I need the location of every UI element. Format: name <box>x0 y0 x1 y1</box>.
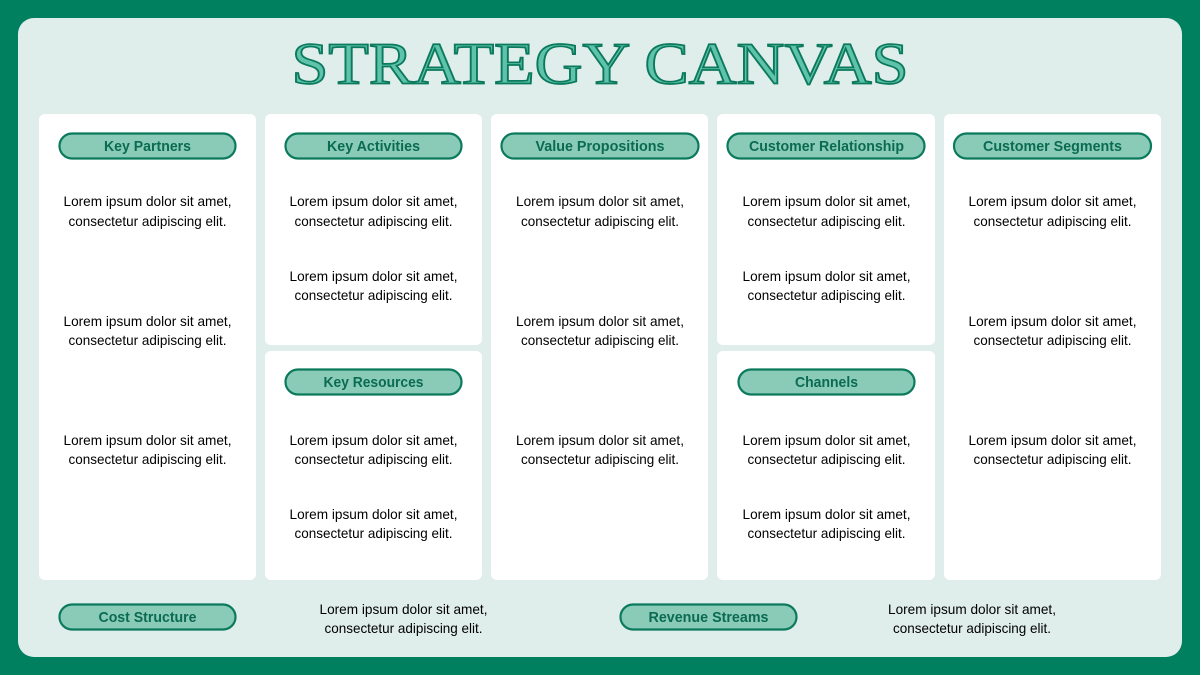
label: key resources: Key Resources <box>324 374 424 391</box>
label: key activities: Key Activities <box>327 138 420 155</box>
label: value propositions: Value Propositions <box>536 138 664 155</box>
text: key resources 2: consectetur adipiscing elit. <box>294 525 452 541</box>
text: key resources 1: consectetur adipiscing elit. <box>294 451 452 467</box>
text: value propositions 3: Lorem ipsum dolor sit amet, <box>516 432 684 448</box>
panel: channels <box>717 351 935 580</box>
text: value propositions 3: consectetur adipiscing elit. <box>521 451 679 467</box>
text: key resources 1: Lorem ipsum dolor sit amet, <box>290 432 458 448</box>
text: value propositions 1: Lorem ipsum dolor sit amet, <box>516 193 684 209</box>
text: customer segments 3: consectetur adipiscing elit. <box>974 451 1132 467</box>
panel: value propositions <box>491 114 708 580</box>
label: customer segments <box>954 134 1151 158</box>
text: key partners 1: Lorem ipsum dolor sit amet, <box>64 193 232 209</box>
text: key resources 2: Lorem ipsum dolor sit amet, <box>290 506 458 522</box>
text: customer segments 3: Lorem ipsum dolor sit amet, <box>968 432 1136 448</box>
label: customer relationship: Customer Relationship <box>749 138 904 155</box>
label: channels: Channels <box>795 374 858 391</box>
text: customer relationship 2: consectetur adipiscing elit. <box>748 287 906 303</box>
text: customer segments 2: Lorem ipsum dolor sit amet, <box>968 313 1136 329</box>
text: customer segments 1: consectetur adipiscing elit. <box>974 213 1132 229</box>
text: key partners 2 <box>64 313 232 348</box>
text: customer relationship 2: Lorem ipsum dolor sit amet, <box>742 268 910 284</box>
text: key activities 1 <box>290 193 458 229</box>
panel: key activities <box>265 114 482 345</box>
label: customer segments: Customer Segments <box>983 138 1122 155</box>
label: channels <box>738 370 914 394</box>
text: value propositions 3 <box>516 432 684 467</box>
text: key activities 1: consectetur adipiscing elit. <box>294 213 452 229</box>
text: channels 1: Lorem ipsum dolor sit amet, <box>742 432 910 448</box>
label: revenue streams <box>620 604 796 630</box>
panel: key partners <box>39 114 256 580</box>
text: revenue streams <box>888 601 1056 636</box>
text: cost structure: Lorem ipsum dolor sit amet, <box>320 601 488 617</box>
text: customer segments 2: consectetur adipiscing elit. <box>974 332 1132 348</box>
title: STRATEGY CANVAS <box>291 31 909 97</box>
text: cost structure: consectetur adipiscing elit. <box>324 620 482 636</box>
text: customer segments 1 <box>968 193 1136 229</box>
text: channels 2: Lorem ipsum dolor sit amet, <box>742 506 910 522</box>
text: key resources 1 <box>290 432 458 467</box>
label: cost structure: Cost Structure <box>98 609 196 626</box>
text: channels 1 <box>742 432 910 467</box>
text: key partners 1 <box>64 193 232 229</box>
label: key activities <box>286 134 462 158</box>
text: revenue streams: Lorem ipsum dolor sit amet, <box>888 601 1056 617</box>
text: customer segments 1: Lorem ipsum dolor sit amet, <box>968 193 1136 209</box>
text: customer relationship 2 <box>742 268 910 303</box>
label: cost structure <box>60 604 236 630</box>
text: key partners 3: Lorem ipsum dolor sit amet, <box>64 432 232 448</box>
text: customer relationship 1: Lorem ipsum dolor sit amet, <box>742 193 910 209</box>
label: key resources <box>286 370 462 394</box>
panel: key resources <box>265 351 482 580</box>
panel: customer segments <box>944 114 1161 580</box>
text: key partners 1: consectetur adipiscing elit. <box>68 213 226 229</box>
text: customer relationship 1 <box>742 193 910 229</box>
text: channels 1: consectetur adipiscing elit. <box>748 451 906 467</box>
label: revenue streams: Revenue Streams <box>648 609 768 626</box>
text: key partners 2: consectetur adipiscing elit. <box>68 332 226 348</box>
text: value propositions 1 <box>516 193 684 229</box>
text: key partners 2: Lorem ipsum dolor sit amet, <box>64 313 232 329</box>
text: customer segments 3 <box>968 432 1136 467</box>
text: key activities 2 <box>290 268 458 303</box>
text: revenue streams: consectetur adipiscing elit. <box>893 620 1051 636</box>
text: channels 2: consectetur adipiscing elit. <box>748 525 906 541</box>
text: key partners 3 <box>64 432 232 467</box>
panel: customer relationship <box>717 114 935 345</box>
text: cost structure <box>320 601 488 636</box>
text: key activities 2: Lorem ipsum dolor sit amet, <box>290 268 458 284</box>
text: value propositions 2 <box>516 313 684 348</box>
text: key resources 2 <box>290 506 458 541</box>
label: customer relationship <box>728 134 924 158</box>
text: value propositions 2: consectetur adipiscing elit. <box>521 332 679 348</box>
text: key activities 2: consectetur adipiscing elit. <box>294 287 452 303</box>
text: value propositions 1: consectetur adipiscing elit. <box>521 213 679 229</box>
text: customer relationship 1: consectetur adipiscing elit. <box>748 213 906 229</box>
label: value propositions <box>502 134 698 158</box>
text: value propositions 2: Lorem ipsum dolor sit amet, <box>516 313 684 329</box>
text: channels 2 <box>742 506 910 541</box>
text: key activities 1: Lorem ipsum dolor sit amet, <box>290 193 458 209</box>
text: customer segments 2 <box>968 313 1136 348</box>
label: key partners: Key Partners <box>104 138 191 155</box>
text: key partners 3: consectetur adipiscing elit. <box>68 451 226 467</box>
label: key partners <box>60 134 236 158</box>
